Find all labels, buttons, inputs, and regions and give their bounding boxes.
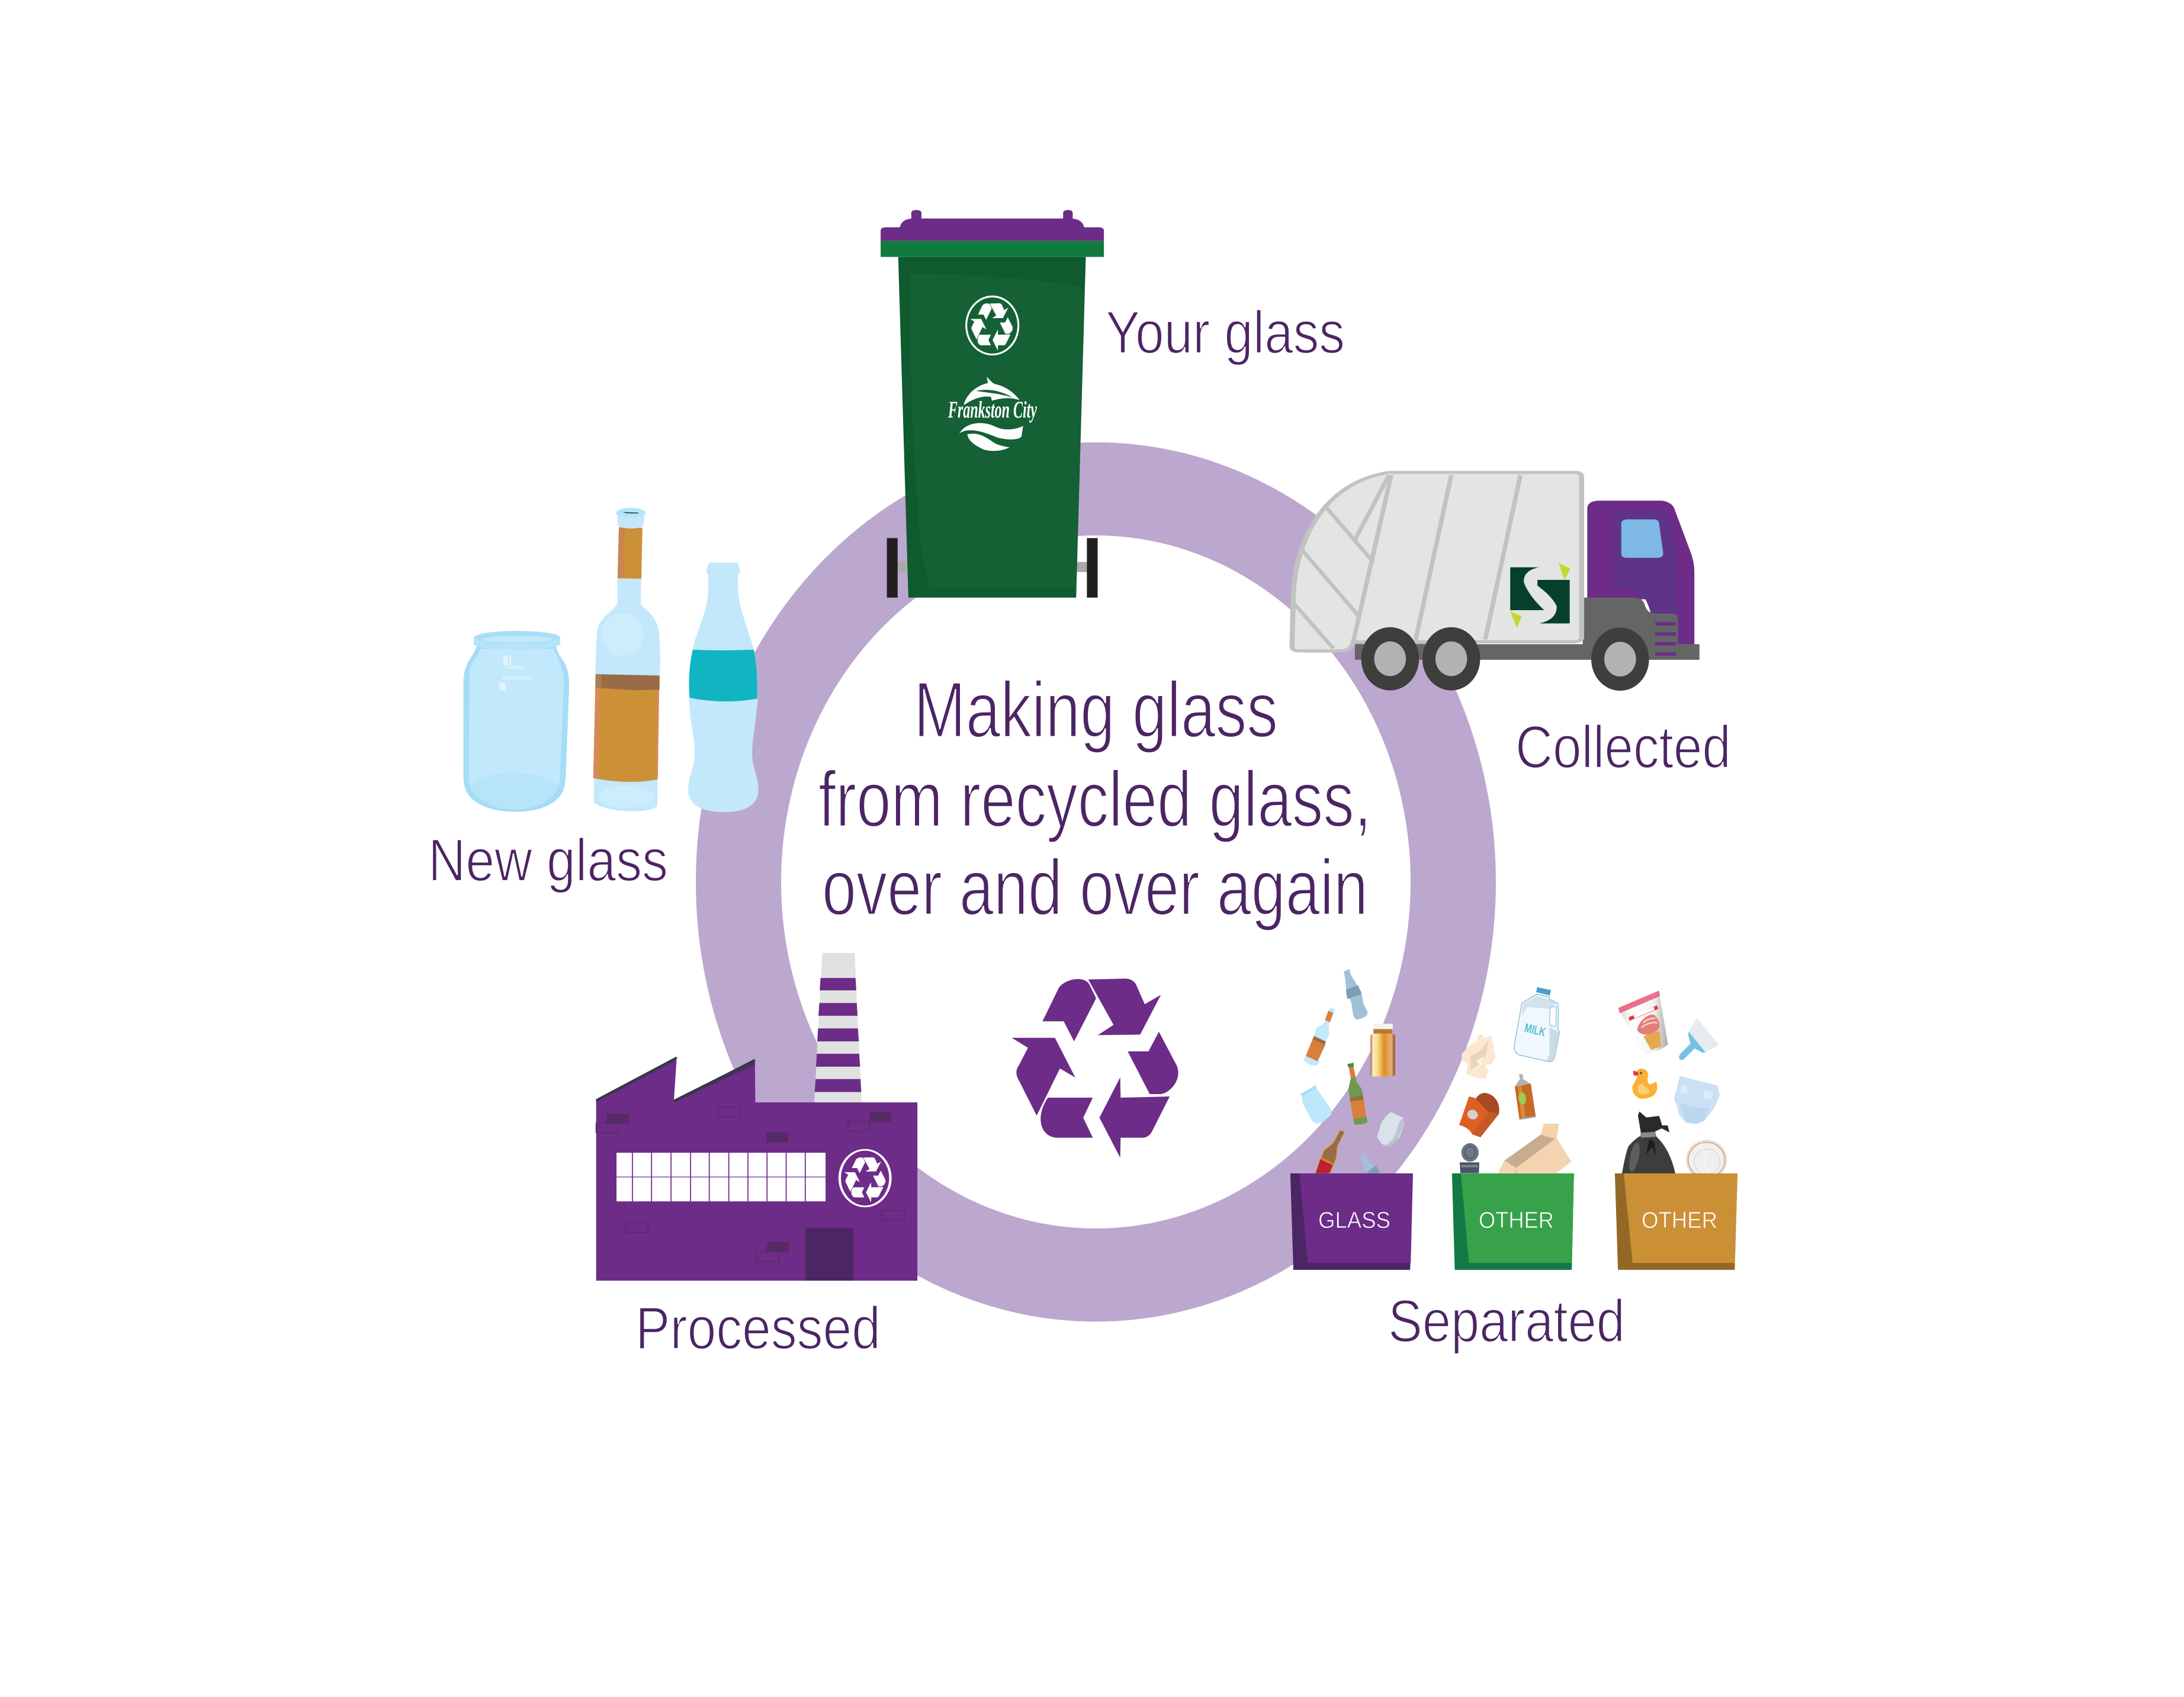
green bin	[1452, 1173, 1574, 1270]
milk bottle	[1514, 987, 1559, 1061]
sorted bins	[1290, 1173, 1737, 1270]
ice cream tub	[1618, 990, 1668, 1055]
central heading: from recycled glass,	[818, 756, 1372, 843]
waste items	[1618, 990, 1727, 1180]
glass soda bottle	[1344, 969, 1367, 1020]
wine bottle	[593, 508, 660, 811]
label: processed: Processed	[635, 1295, 881, 1362]
new glass containers	[464, 508, 759, 812]
nappy	[1674, 1076, 1720, 1124]
green glass bottle	[1347, 1063, 1367, 1125]
bin label: other: OTHER	[1642, 1208, 1717, 1233]
crumpled paper	[1462, 1035, 1496, 1079]
dolphin	[963, 377, 1020, 405]
bin body	[898, 257, 1085, 598]
compactor body	[1292, 473, 1582, 651]
central heading	[818, 666, 1372, 932]
rubber duck	[1632, 1069, 1657, 1099]
black rubbish bag	[1622, 1112, 1675, 1173]
small blue bottle	[1360, 1154, 1380, 1173]
soda bottle	[688, 563, 759, 812]
label: collected: Collected	[1515, 714, 1731, 781]
bin lid	[881, 210, 1104, 257]
glass wine bottle	[1304, 1008, 1335, 1066]
food carton	[1459, 1093, 1499, 1137]
truck cab	[1587, 501, 1694, 644]
cycle ring	[696, 442, 1496, 1321]
factory building	[596, 1057, 917, 1281]
factory door	[805, 1228, 853, 1281]
other items	[1459, 987, 1571, 1173]
chimney	[814, 953, 862, 1102]
squeegee	[1679, 1018, 1719, 1060]
waves	[959, 423, 1023, 451]
cardboard box	[1498, 1124, 1571, 1173]
wheels and axle	[887, 538, 1098, 598]
glass jar	[464, 631, 569, 812]
clear glass container	[1377, 1112, 1405, 1147]
bin label: other: OTHER	[1479, 1208, 1554, 1233]
factory bricks	[596, 1108, 904, 1262]
aerosol can	[1514, 1074, 1536, 1120]
milk label: MILK	[1523, 1021, 1547, 1040]
tin can	[1460, 1143, 1479, 1173]
icon: recycling badge on factory	[840, 1150, 891, 1207]
roof shading	[596, 1057, 755, 1103]
truck wheels	[1361, 627, 1649, 691]
icon: recycling badge on bin	[966, 296, 1019, 354]
truck logo	[1510, 563, 1570, 628]
Frankston City logo text: Frankston City	[948, 396, 1037, 423]
icon: central recycling symbol	[1011, 979, 1178, 1158]
truck chassis	[1355, 598, 1700, 660]
tan bin	[1615, 1173, 1737, 1270]
central heading: Making glass	[914, 666, 1278, 754]
wheelie bin: your glass	[881, 210, 1104, 598]
Frankston City logo emblem	[959, 377, 1023, 451]
brown beer bottle	[1314, 1129, 1345, 1173]
label: separated: Separated	[1388, 1288, 1625, 1355]
factory	[596, 953, 917, 1281]
small glass jar	[1300, 1085, 1331, 1124]
falling glass items	[1300, 969, 1405, 1173]
glass bin	[1290, 1173, 1413, 1270]
central heading: over and over again	[822, 844, 1368, 932]
bin label: glass: GLASS	[1318, 1208, 1390, 1233]
amber glass jar	[1370, 1024, 1395, 1076]
broken plate	[1686, 1140, 1727, 1180]
factory windows	[616, 1153, 826, 1201]
collection truck	[1292, 473, 1700, 691]
label: new glass: New glass	[428, 827, 668, 894]
label: your glass: Your glass	[1106, 300, 1345, 366]
